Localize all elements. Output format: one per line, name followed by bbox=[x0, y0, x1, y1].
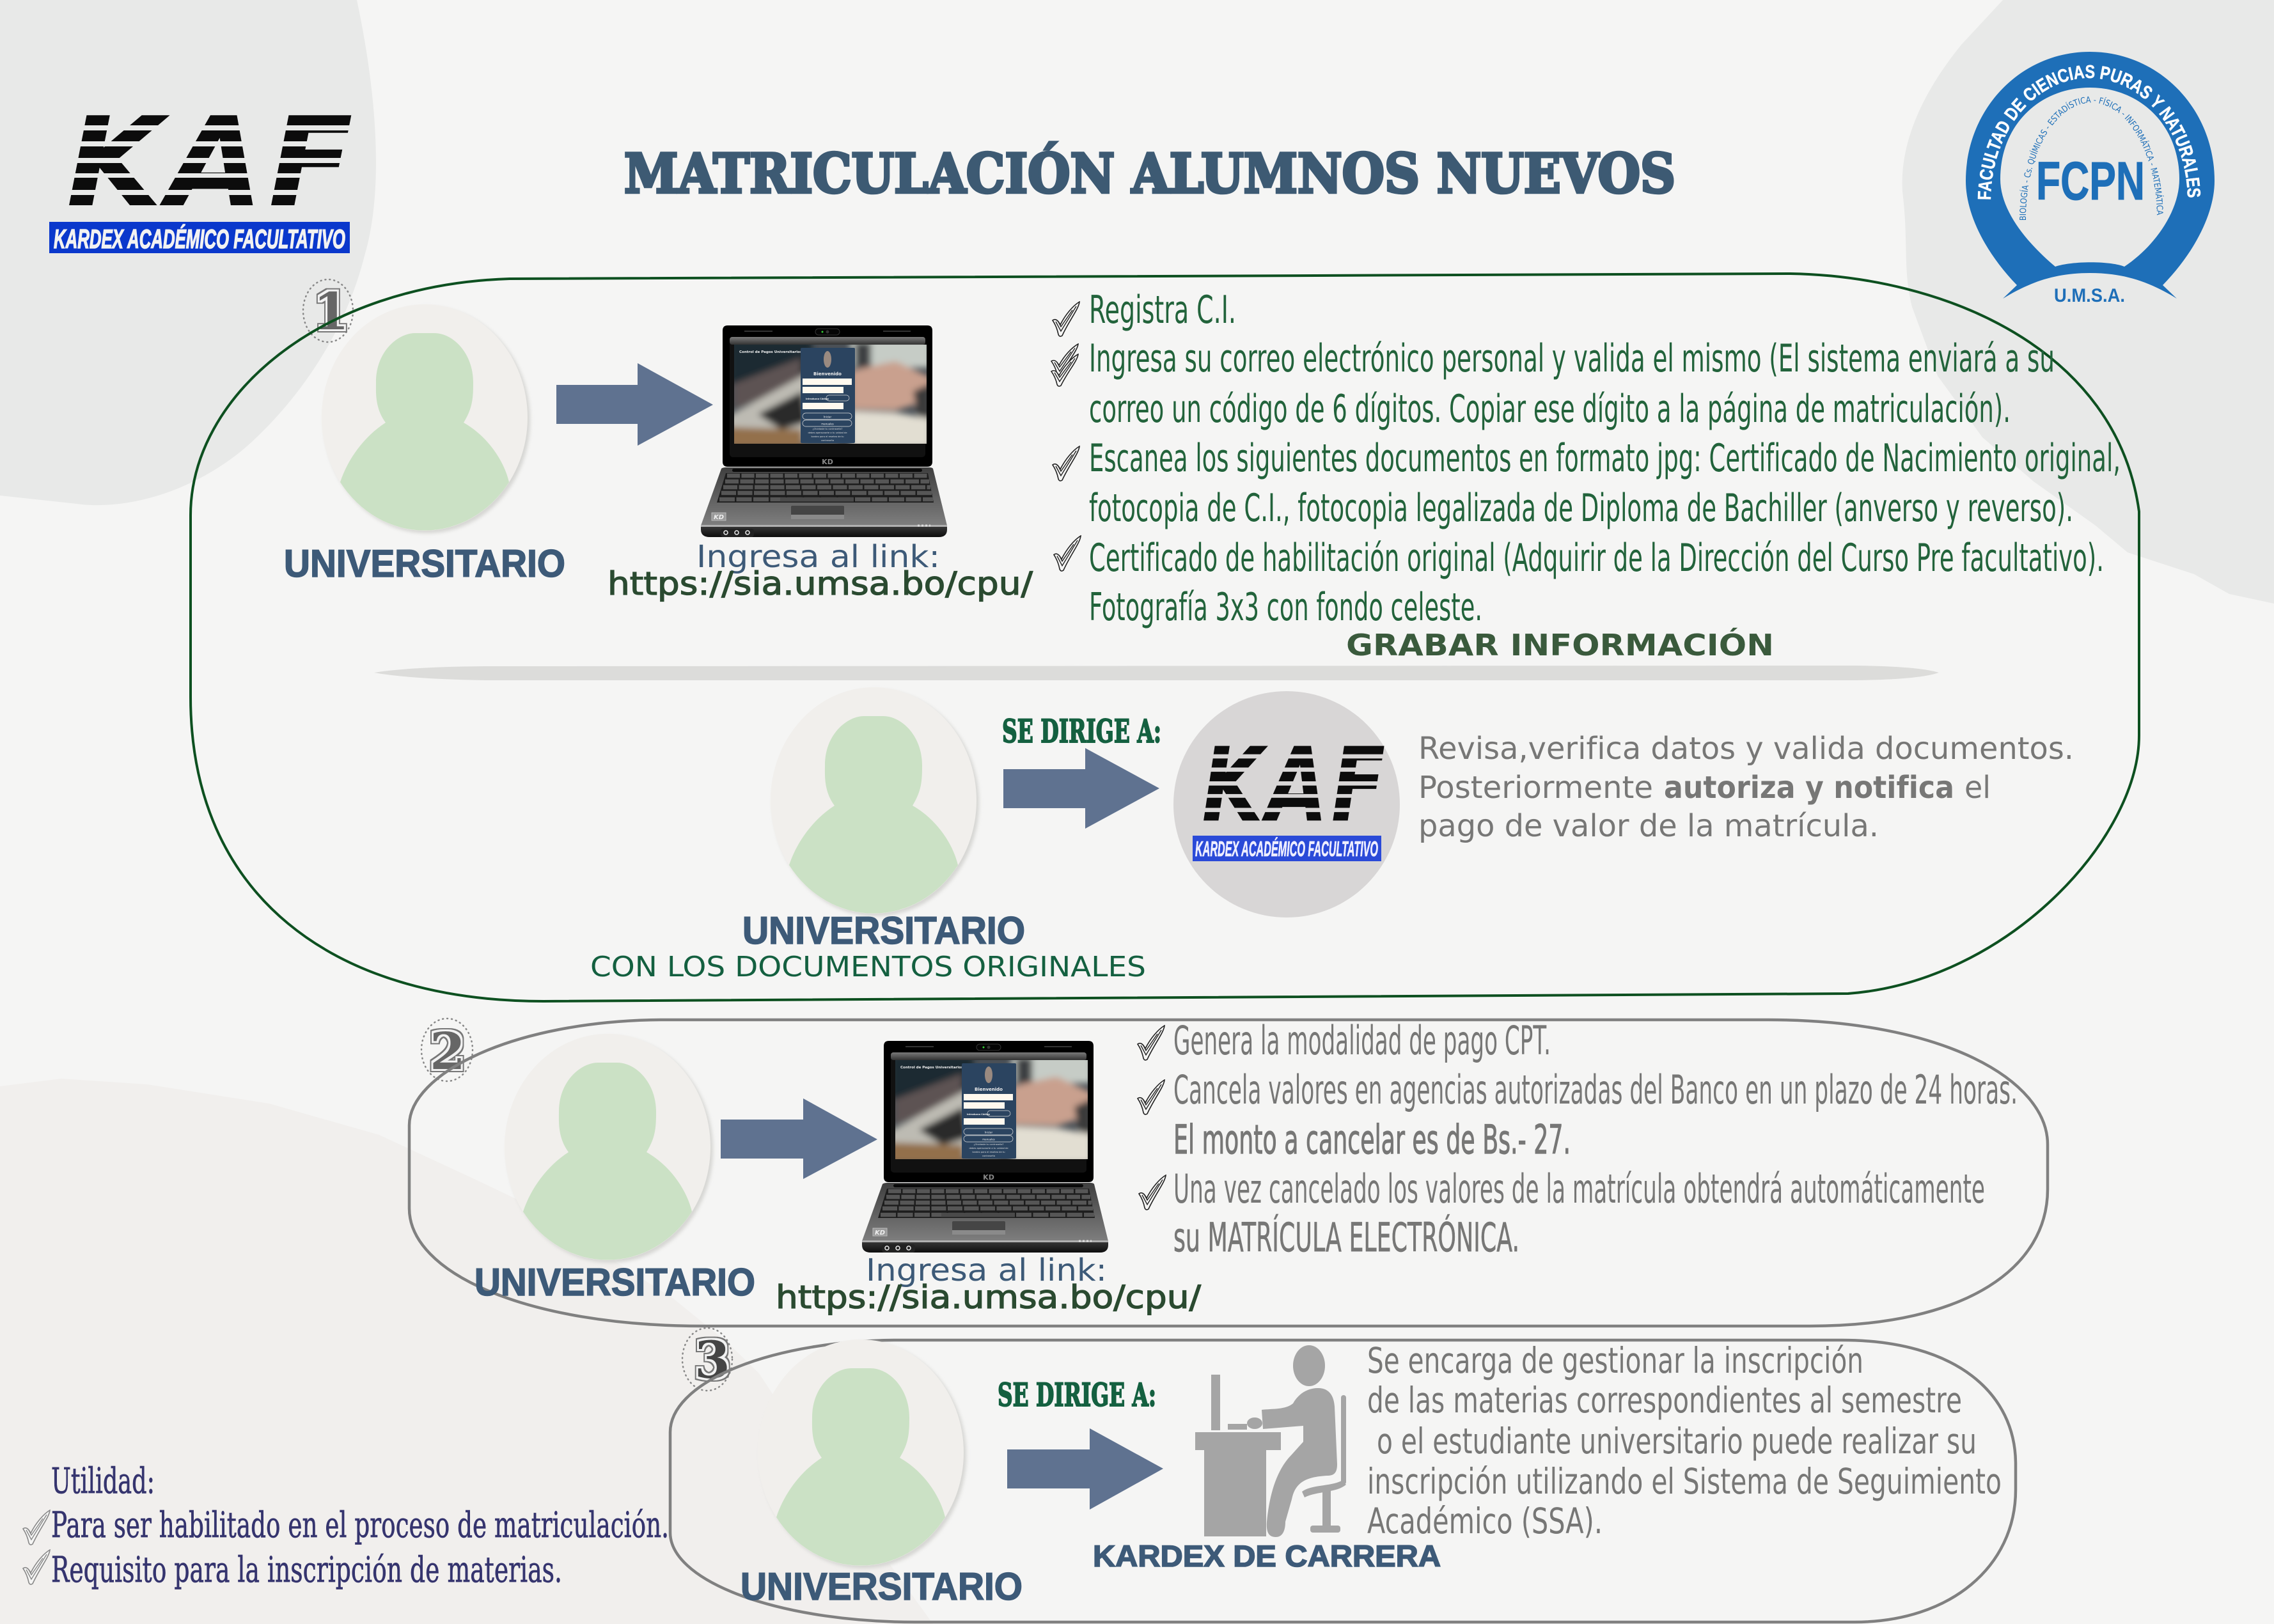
checklist: step 1: Fotografía 3x3 con fondo celeste. bbox=[1089, 585, 1482, 630]
KAF circle logo bbox=[1173, 691, 1400, 917]
revision text: pago de valor de la matrícula. bbox=[1418, 808, 1879, 844]
laptop: step 1 bbox=[701, 325, 947, 537]
logo banner: KARDEX ACADÉMICO FACULTATIVO bbox=[54, 224, 345, 254]
arrow: step 3 bbox=[1007, 1428, 1163, 1510]
logo: FCPN: FCPN bbox=[2036, 151, 2145, 211]
logo: FCPN: BIOLOGÍA - Cs. QUÍMICAS - ESTADÍSTICA - FÍSICA - INFORMÁTICA - MATEMÁTICA bbox=[2019, 96, 2164, 220]
avatar: step 1 bbox=[322, 304, 530, 533]
checklist: step 2: Genera la modalidad de pago CPT. bbox=[1173, 1017, 1551, 1064]
checklist: step 1 bbox=[1051, 288, 2121, 630]
label: universitario step 3: UNIVERSITARIO bbox=[741, 1565, 1023, 1608]
panel 2 outline bbox=[409, 1020, 2048, 1326]
brush: bottom left bbox=[0, 1079, 933, 1624]
checklist: step 1: Registra C.I. bbox=[1089, 288, 1236, 332]
divider bbox=[374, 666, 1939, 680]
avatar: step 2 bbox=[505, 1034, 713, 1263]
title: MATRICULACIÓN ALUMNOS NUEVOS bbox=[624, 142, 1675, 205]
step badge 1: 1 bbox=[313, 281, 349, 341]
link url step 1: https://sia.umsa.bo/cpu/ bbox=[608, 565, 1033, 602]
KAF circle logo: KARDEX ACADÉMICO FACULTATIVO bbox=[1195, 837, 1378, 861]
label: universitario with documents: UNIVERSITARIO bbox=[742, 909, 1025, 952]
panel 3 outline bbox=[670, 1340, 2016, 1622]
avatar: step 1 with documents bbox=[771, 687, 979, 916]
step 3 text: inscripción utilizando el Sistema de Seguimiento bbox=[1367, 1461, 2002, 1502]
utility notes: Para ser habilitado en el proceso de matriculación. bbox=[51, 1504, 669, 1545]
avatar: step 3 bbox=[758, 1339, 966, 1568]
logo: FCPN: FACULTAD DE CIENCIAS PURAS Y NATURALES bbox=[1977, 65, 2201, 199]
step badge 2 bbox=[421, 1019, 473, 1081]
logo: FCPN bbox=[1966, 52, 2215, 306]
checklist: step 2: El monto a cancelar es de Bs.- 27. bbox=[1173, 1116, 1571, 1163]
utility notes: Utilidad: bbox=[51, 1460, 155, 1501]
utility notes: Requisito para la inscripción de materias. bbox=[51, 1549, 562, 1590]
se dirige a label: SE DIRIGE A: bbox=[1002, 712, 1161, 750]
link prompt step 1: Ingresa al link: bbox=[696, 539, 940, 575]
step 3 text: o el estudiante universitario puede realizar su bbox=[1377, 1421, 1977, 1462]
checklist: step 2: su MATRÍCULA ELECTRÓNICA. bbox=[1173, 1214, 1519, 1261]
revision text: autoriza y notifica bbox=[1664, 770, 1954, 806]
revision text: Posteriormente bbox=[1418, 770, 1653, 806]
link prompt step 2: Ingresa al link: bbox=[866, 1253, 1107, 1288]
laptop: step 2 bbox=[862, 1041, 1108, 1253]
revision text: el bbox=[1964, 770, 1991, 806]
step badge 3 bbox=[682, 1328, 732, 1391]
step badge 3: 3 bbox=[694, 1330, 730, 1390]
kardex de carrera label: KARDEX DE CARRERA bbox=[1093, 1539, 1441, 1573]
brush: top right bbox=[1902, 0, 2274, 604]
label: universitario with documents: CON LOS DOCUMENTOS ORIGINALES bbox=[590, 951, 1146, 983]
arrow: to KAF office bbox=[1003, 748, 1159, 829]
step 3 text: de las materias correspondientes al semestre bbox=[1367, 1380, 1962, 1421]
step 3 text: Académico (SSA). bbox=[1367, 1501, 1603, 1542]
step badge 1 bbox=[303, 279, 353, 342]
step badge 2: 2 bbox=[430, 1021, 466, 1081]
step 3 text: Se encarga de gestionar la inscripción bbox=[1367, 1340, 1863, 1381]
checklist: step 2 bbox=[1138, 1017, 2018, 1261]
logo banner bbox=[49, 222, 350, 254]
brush: top left bbox=[0, 0, 376, 505]
arrow: to laptop bbox=[556, 363, 713, 446]
arrow: step 2 bbox=[721, 1098, 877, 1179]
logo: KAF bbox=[49, 91, 355, 254]
label: universitario with documents bbox=[590, 909, 1146, 983]
logo: FCPN: U.M.S.A. bbox=[2054, 285, 2125, 306]
panel 1 outline bbox=[191, 274, 2139, 1001]
utility notes bbox=[23, 1460, 669, 1590]
grabar informacion: GRABAR INFORMACIÓN bbox=[1346, 628, 1774, 662]
label: universitario step 1: UNIVERSITARIO bbox=[284, 542, 565, 585]
revision text: Revisa,verifica datos y valida documentos. bbox=[1418, 731, 2074, 767]
link url step 2: https://sia.umsa.bo/cpu/ bbox=[776, 1279, 1201, 1316]
revision text bbox=[1418, 731, 2074, 844]
se dirige a label step 3: SE DIRIGE A: bbox=[998, 1376, 1156, 1414]
step 3 text bbox=[1367, 1340, 2002, 1542]
icon: person at desk bbox=[1195, 1345, 1346, 1537]
label: universitario step 2: UNIVERSITARIO bbox=[474, 1261, 755, 1304]
